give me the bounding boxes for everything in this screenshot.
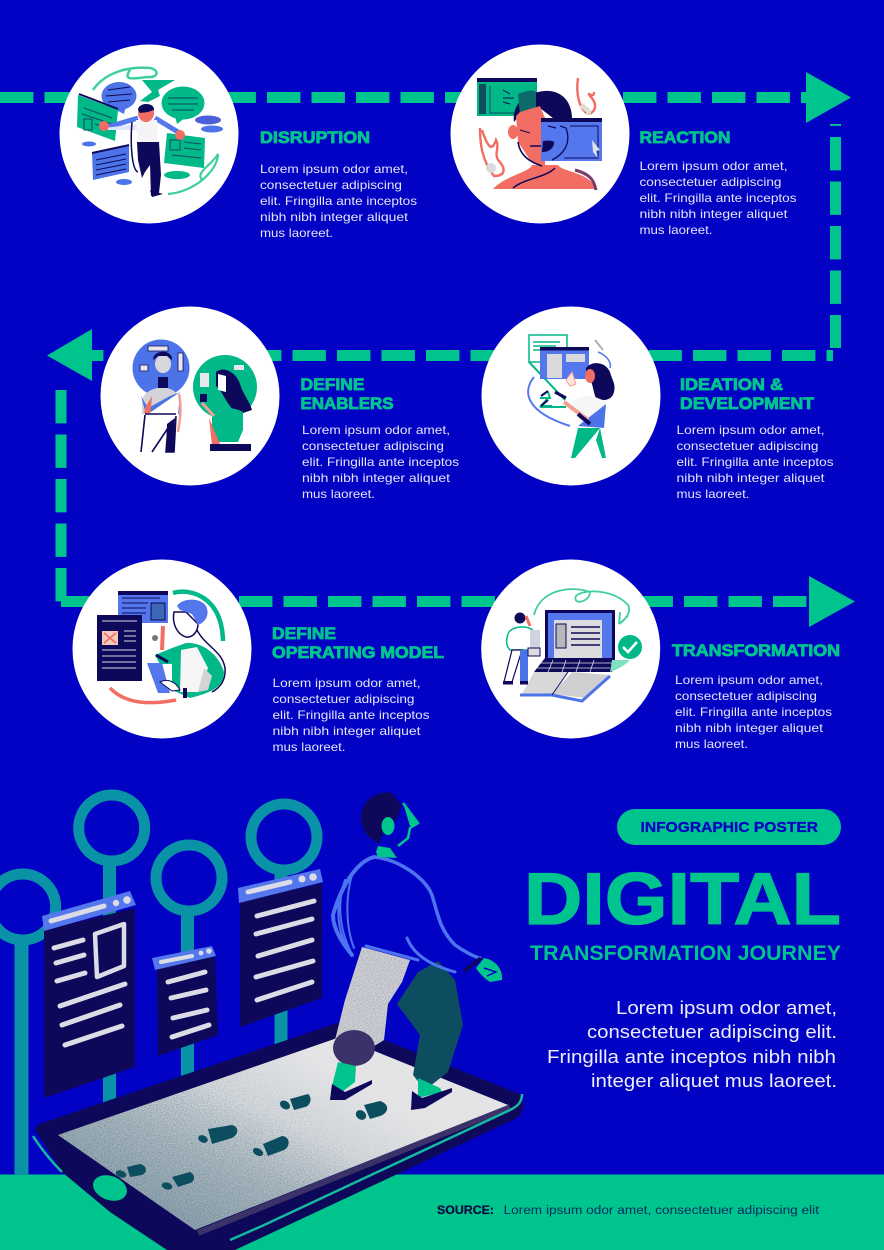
intro paragraph: integer aliquet mus laoreet. <box>591 1071 837 1091</box>
heading: reaction: REACTION <box>640 128 730 147</box>
body text: define operating model <box>272 676 430 754</box>
body text: transformation: nibh nibh integer aliquet <box>675 721 824 735</box>
body text: define enablers: nibh nibh integer aliquet <box>302 471 451 485</box>
step 2: reaction <box>450 44 796 237</box>
poster illustration: walking person <box>330 793 502 1110</box>
screen grain <box>58 1037 508 1230</box>
body text: ideation and development: nibh nibh integer aliquet <box>676 471 825 485</box>
source line: SOURCE: <box>437 1203 494 1217</box>
body text: ideation and development: Lorem ipsum odor amet, <box>676 423 824 437</box>
body text: disruption: consectetuer adipiscing <box>260 178 402 192</box>
step 1: disruption <box>60 44 417 240</box>
poster illustration: phone with footprints <box>33 1022 523 1250</box>
source line <box>437 1203 820 1217</box>
heading: define enablers: DEFINE <box>300 375 364 394</box>
lower dashed line <box>61 596 809 607</box>
body text: transformation: elit. Fringilla ante inceptos <box>675 705 832 719</box>
body text: ideation and development: elit. Fringilla ante inceptos <box>676 455 834 469</box>
phone gritty edge <box>198 1107 510 1233</box>
heading: transformation: TRANSFORMATION <box>672 641 840 660</box>
body text: transformation: consectetuer adipiscing <box>675 689 817 703</box>
icon circle: reaction <box>450 44 630 224</box>
body text: reaction: nibh nibh integer aliquet <box>640 207 788 221</box>
signpost rings and stems <box>0 795 317 1175</box>
cuff and hand <box>464 958 502 982</box>
tag text: INFOGRAPHIC POSTER <box>640 819 818 836</box>
icon circle: operating model <box>72 560 252 738</box>
front leg <box>335 947 410 1066</box>
body text: define operating model: nibh nibh integer aliquet <box>272 724 421 738</box>
body text: define enablers: mus laoreet. <box>302 487 375 501</box>
arrow head: middle left <box>47 329 92 381</box>
screen panel: left <box>42 891 136 1098</box>
heading: define operating model: DEFINE <box>272 624 336 643</box>
arrow head: lower right <box>809 576 855 627</box>
icon circle: ideation <box>482 306 660 486</box>
step 3: define enablers <box>100 306 459 501</box>
heading: ideation and development <box>680 375 815 413</box>
phone screen <box>58 1037 508 1230</box>
subtitle: TRANSFORMATION JOURNEY <box>530 942 841 965</box>
intro paragraph: Fringilla ante inceptos nibh nibh <box>547 1047 836 1067</box>
left vertical dashed line <box>56 390 66 602</box>
body text: reaction: Lorem ipsum odor amet, <box>640 159 788 173</box>
body text: ideation and development <box>676 423 834 501</box>
body text: transformation: Lorem ipsum odor amet, <box>675 673 823 687</box>
body text: define enablers: consectetuer adipiscing <box>302 439 444 453</box>
body text: disruption: mus laoreet. <box>260 226 333 240</box>
poster illustration: signposts <box>0 795 323 1175</box>
heading: define enablers <box>300 375 394 413</box>
shoes <box>330 1062 452 1110</box>
footer band <box>0 1174 884 1250</box>
body text: disruption: elit. Fringilla ante inceptos <box>260 194 417 208</box>
shirt outline <box>333 857 480 972</box>
top dashed line <box>0 92 806 103</box>
body text: ideation and development: consectetuer adipiscing <box>676 439 818 453</box>
head <box>361 793 418 858</box>
step 5: define operating model <box>72 560 444 754</box>
body text: define operating model: mus laoreet. <box>272 740 346 754</box>
source line: Lorem ipsum odor amet, consectetuer adipiscing elit <box>504 1205 820 1217</box>
journey path: dashed arrows <box>0 72 855 627</box>
icon circle: disruption <box>60 44 238 224</box>
body text: reaction: elit. Fringilla ante inceptos <box>640 191 796 205</box>
phone body <box>35 1022 523 1250</box>
body text: disruption: Lorem ipsum odor amet, <box>260 162 408 176</box>
body text: define enablers <box>302 423 459 501</box>
home button <box>89 1171 131 1205</box>
screen panel: middle <box>152 946 218 1056</box>
footprints <box>115 1094 387 1191</box>
heading: ideation and development: DEVELOPMENT <box>680 394 815 413</box>
body text: reaction: consectetuer adipiscing <box>640 175 782 189</box>
right vertical dashed line <box>830 124 841 348</box>
icon circle: transformation <box>481 560 660 738</box>
step 6: transformation <box>481 560 840 751</box>
screen panel: right <box>238 869 323 1027</box>
middle dashed line <box>70 350 833 361</box>
heading: define operating model: OPERATING MODEL <box>272 643 444 662</box>
body text: disruption: nibh nibh integer aliquet <box>260 210 409 224</box>
tag pill <box>617 809 841 845</box>
icon circle: define enablers <box>100 306 280 486</box>
intro paragraph <box>547 998 837 1091</box>
intro paragraph: consectetuer adipiscing elit. <box>587 1022 837 1042</box>
back leg <box>397 961 463 1090</box>
body text: transformation: mus laoreet. <box>675 737 748 751</box>
body text: define operating model: consectetuer adipiscing <box>272 692 414 706</box>
heading: define enablers: ENABLERS <box>300 394 394 413</box>
body text: define enablers: Lorem ipsum odor amet, <box>302 423 450 437</box>
main title: DIGITAL <box>524 859 841 940</box>
intro paragraph: Lorem ipsum odor amet, <box>616 998 837 1018</box>
body text: reaction <box>640 159 796 237</box>
body text: define operating model: elit. Fringilla ante inceptos <box>272 708 430 722</box>
arrow head: top right <box>806 72 851 123</box>
heading: ideation and development: IDEATION & <box>680 375 783 394</box>
heading: disruption: DISRUPTION <box>260 128 370 147</box>
body text: ideation and development: mus laoreet. <box>676 487 750 501</box>
body text: define enablers: elit. Fringilla ante inceptos <box>302 455 459 469</box>
knee shading <box>333 1030 375 1066</box>
body text: reaction: mus laoreet. <box>640 223 712 237</box>
step 4: ideation and development <box>482 306 834 501</box>
body text: disruption <box>260 162 417 240</box>
body text: define operating model: Lorem ipsum odor amet, <box>272 676 420 690</box>
heading: define operating model <box>272 624 444 662</box>
body text: transformation <box>675 673 832 751</box>
phone teal edge <box>33 1094 522 1240</box>
